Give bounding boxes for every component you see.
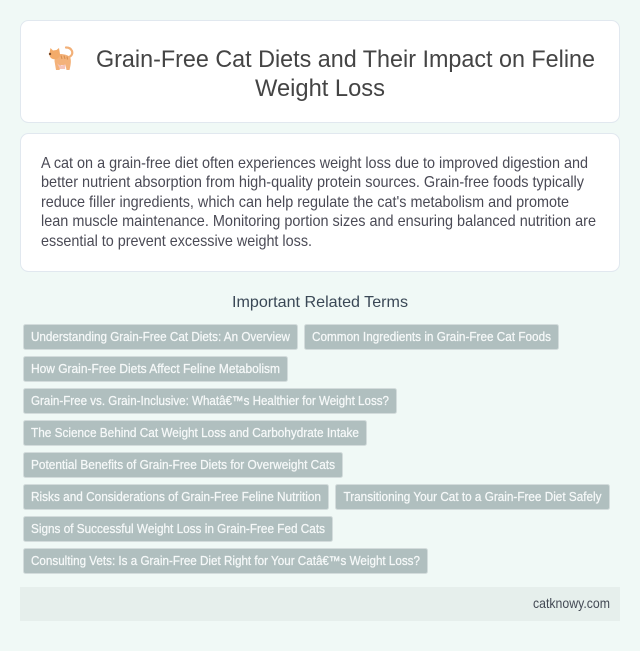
text block: description: lean muscle maintenance. Monitoring portion sizes and ensuring balanced nutrition are: [41, 213, 596, 230]
tag 7: [24, 484, 328, 510]
tag 4: Grain-Free vs. Grain-Inclusive: Whatâ€™s Healthier for Weight Loss?: [31, 394, 389, 408]
tag 5: [24, 420, 366, 446]
title: [96, 46, 595, 102]
footer: catknowy.com: [533, 595, 610, 611]
tag 3: How Grain-Free Diets Affect Feline Metabolism: [31, 362, 280, 376]
text block: description: essential to prevent excessive weight loss.: [41, 233, 312, 250]
tag 2: Common Ingredients in Grain-Free Cat Foods: [312, 330, 551, 344]
heading: important related terms: Important Related Terms: [232, 294, 408, 311]
text block: description: better nutrient absorption from high-quality protein sources. Grain-free foods typically: [41, 174, 584, 191]
icon: cat: [49, 48, 72, 70]
title: Grain-Free Cat Diets and Their Impact on Feline: [96, 46, 595, 73]
tag 8: Transitioning Your Cat to a Grain-Free Diet Safely: [344, 490, 602, 504]
tag 9: Signs of Successful Weight Loss in Grain-Free Fed Cats: [31, 522, 325, 536]
tag 5: The Science Behind Cat Weight Loss and Carbohydrate Intake: [31, 426, 359, 440]
tag 9: [24, 516, 332, 542]
tag 3: [24, 356, 288, 382]
tag 7: Risks and Considerations of Grain-Free Feline Nutrition: [31, 490, 321, 504]
footer: [20, 587, 620, 621]
tag 4: [24, 388, 396, 414]
title: Weight Loss: [255, 75, 385, 102]
tag 8: [336, 484, 610, 510]
tag 6: Potential Benefits of Grain-Free Diets for Overweight Cats: [31, 458, 335, 472]
tag 2: [304, 324, 558, 350]
text block: description: [41, 155, 596, 250]
tag 1: [24, 324, 298, 350]
tag 10: Consulting Vets: Is a Grain-Free Diet Right for Your Catâ€™s Weight Loss?: [31, 554, 420, 568]
panel: title card: [20, 20, 620, 122]
tags: related terms: [24, 324, 610, 574]
panel: description text card: [20, 134, 620, 272]
text block: description: reduce filler ingredients, which can help regulate the cat's metabolism and promote: [41, 194, 569, 211]
text block: description: A cat on a grain-free diet often experiences weight loss due to improved digestion and: [41, 155, 588, 172]
tag 6: [24, 452, 342, 478]
tag 10: [24, 548, 428, 574]
tag 1: Understanding Grain-Free Cat Diets: An Overview: [31, 330, 291, 344]
